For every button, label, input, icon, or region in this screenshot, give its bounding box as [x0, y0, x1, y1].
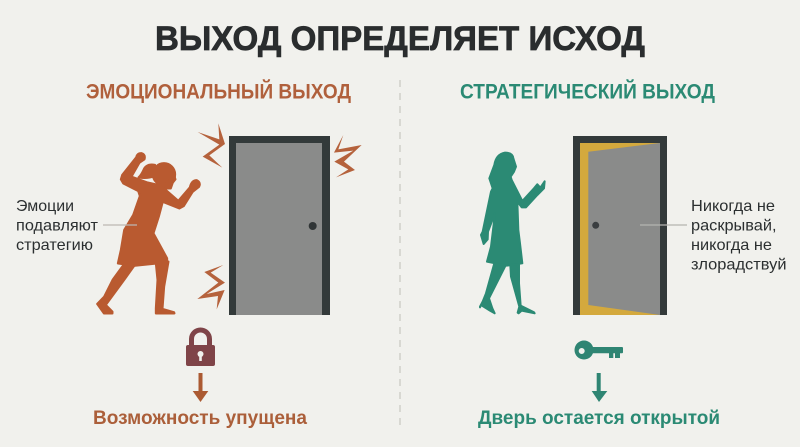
panel: emotional exit [16, 123, 362, 429]
label connector [103, 224, 137, 226]
panel: strategic exit [478, 136, 786, 429]
text block: never reveal label [691, 198, 786, 274]
text block: emotions label: стратегию [16, 237, 93, 254]
text block: emotions label: Эмоции [16, 198, 74, 215]
text block: never reveal label: злорадствуй [691, 256, 786, 274]
text block: emotions label: подавляют [16, 218, 99, 234]
arrow: down to missed chance [193, 373, 208, 402]
text block: never reveal label: раскрывай, [691, 218, 776, 234]
arrow: down to open door [592, 373, 607, 402]
title: ВЫХОД ОПРЕДЕЛЯЕТ ИСХОД [155, 20, 645, 58]
icon: closed door [229, 136, 330, 315]
text block: emotions label [16, 198, 99, 254]
icon: padlock [186, 330, 215, 366]
icon: angry woman silhouette [97, 153, 200, 313]
icon: calm woman silhouette [480, 153, 545, 313]
label connector [640, 224, 687, 226]
icon: open door [573, 136, 667, 315]
heading: strategic exit: СТРАТЕГИЧЕСКИЙ ВЫХОД [460, 78, 715, 104]
icon: impact sparks [197, 123, 362, 309]
outcome: door stays open: Дверь остается открытой [478, 407, 720, 429]
outcome: missed chance: Возможность упущена [93, 407, 307, 429]
text block: never reveal label: Никогда не [691, 198, 775, 215]
text block: never reveal label: никогда не [691, 237, 772, 254]
heading: emotional exit: ЭМОЦИОНАЛЬНЫЙ ВЫХОД [86, 78, 351, 104]
icon: key [574, 340, 623, 360]
